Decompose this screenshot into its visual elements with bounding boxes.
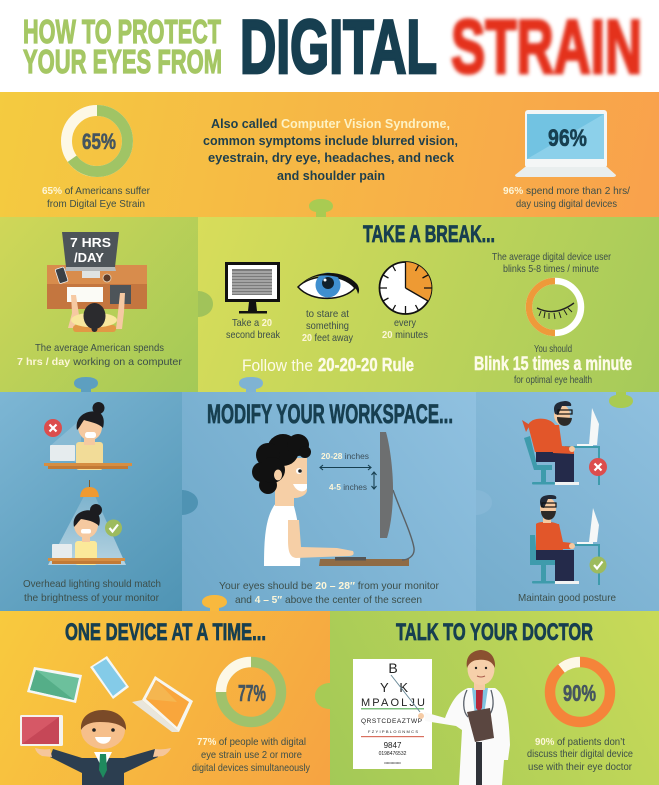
illustration: woman with no overhead light bbox=[44, 402, 132, 470]
donut chart: 90% bbox=[550, 662, 610, 722]
panel: overhead lighting bbox=[0, 377, 182, 611]
annotation: 20-28 inches: 20-28 inches bbox=[321, 451, 369, 461]
callout: follow the 20-20-20 rule: 20-20-20 Rule bbox=[318, 355, 414, 375]
annotation: 20-28 inches bbox=[320, 451, 371, 470]
text: average blink rate bbox=[492, 251, 611, 275]
icon: eye bbox=[298, 272, 359, 298]
panel: take a break bbox=[198, 217, 659, 392]
caption: overhead lighting: Overhead lighting should match bbox=[23, 578, 161, 590]
icon: green phone bbox=[27, 667, 82, 703]
caption: 77% of people: digital devices simultaneously bbox=[192, 762, 311, 774]
icon: laptop 96%: 96% bbox=[548, 125, 587, 152]
icon: clock bbox=[380, 262, 432, 314]
icon: orange laptop bbox=[132, 676, 193, 732]
illustration: woman with overhead lamp bbox=[48, 480, 126, 565]
caption: maintain good posture: Maintain good posture bbox=[518, 592, 616, 604]
eye chart: MPAOLJU bbox=[361, 697, 425, 709]
caption: eye distance: Your eyes should be 20 – 28″ from your monitor bbox=[219, 580, 439, 592]
caption: average American: 7 hrs / day working on a computer bbox=[17, 356, 183, 368]
callout: follow the 20-20-20 rule: Follow the bbox=[242, 357, 313, 375]
icon: puzzle tab bbox=[239, 377, 263, 392]
icon: puzzle tab bbox=[202, 595, 227, 611]
eye chart: 0000000000 bbox=[384, 761, 401, 765]
annotation: 4-5 inches: 4-5 inches bbox=[329, 482, 367, 492]
icon: puzzle tab bbox=[476, 490, 492, 515]
illustration: man with bad posture bbox=[522, 401, 600, 485]
text: computer vision syndrome description: and shoulder pain bbox=[277, 168, 385, 183]
icon: red cross bbox=[589, 458, 607, 476]
caption: to stare at something 20 feet away: to stare at bbox=[306, 308, 349, 320]
caption: 90% of patients: use with their eye doctor bbox=[528, 761, 632, 773]
caption: 65% of Americans: 65% of Americans suffer bbox=[42, 185, 150, 197]
heading: one device at a time: ONE DEVICE AT A TIME... bbox=[65, 619, 266, 646]
panel: intro statistics bbox=[0, 92, 659, 218]
callout: blink 15 times a minute bbox=[474, 343, 632, 386]
eye chart: B bbox=[388, 660, 398, 676]
donut chart: 65% bbox=[66, 110, 128, 172]
caption: every 20 minutes bbox=[382, 317, 428, 341]
text: average blink rate: blinks 5-8 times / minute bbox=[503, 263, 599, 275]
eye chart: 9847 bbox=[384, 741, 402, 750]
title word: digital: DIGITAL bbox=[240, 5, 437, 90]
text: computer vision syndrome description: Also called Computer Vision Syndrome, bbox=[211, 116, 450, 131]
caption: every 20 minutes: every bbox=[394, 317, 417, 329]
illustration: doctor bbox=[391, 650, 510, 785]
panel: one device at a time bbox=[0, 595, 330, 785]
caption: every 20 minutes: 20 minutes bbox=[382, 329, 428, 341]
title line: how to protect: HOW TO PROTECT bbox=[23, 13, 221, 50]
callout: blink 15 times a minute: You should bbox=[534, 343, 572, 355]
caption: eye distance: and 4 – 5″ above the center of the screen bbox=[235, 594, 422, 606]
panel: talk to your doctor bbox=[315, 611, 659, 785]
caption: 65% of Americans bbox=[42, 185, 150, 210]
icon: puzzle tab bbox=[182, 490, 198, 515]
heading: take a break: TAKE A BREAK... bbox=[363, 221, 495, 248]
caption: average American bbox=[17, 342, 183, 368]
caption: 65% of Americans: from Digital Eye Strain bbox=[47, 198, 145, 210]
icon: red tablet bbox=[20, 715, 63, 746]
caption: take a 20 second break: second break bbox=[226, 329, 281, 341]
illustration: juggling man bbox=[35, 710, 171, 785]
caption: average American: The average American spends bbox=[35, 342, 164, 354]
icon: puzzle tab bbox=[315, 683, 330, 709]
caption: 77% of people bbox=[192, 736, 311, 774]
caption: take a 20 second break bbox=[226, 317, 281, 341]
annotation: 4-5 inches bbox=[329, 472, 376, 492]
illustration: man with good posture bbox=[530, 495, 600, 585]
callout: follow the 20-20-20 rule bbox=[242, 355, 414, 375]
panel: 7 hours a day bbox=[0, 199, 333, 392]
icon: red cross bbox=[44, 419, 62, 437]
caption: 90% of patients: 90% of patients don’t bbox=[535, 736, 625, 748]
caption: 77% of people: 77% of people with digital bbox=[197, 736, 306, 748]
callout: blink 15 times a minute: for optimal eye health bbox=[514, 374, 592, 386]
caption: 96% spend: day using digital devices bbox=[516, 198, 617, 210]
caption: 77% of people: eye strain use 2 or more bbox=[201, 749, 302, 761]
illustration: person at desk: /DAY bbox=[74, 251, 105, 265]
illustration: man at monitor bbox=[252, 432, 414, 566]
caption: 90% of patients bbox=[527, 736, 633, 773]
icon: green check bbox=[105, 520, 122, 536]
caption: take a 20 second break: Take a 20 bbox=[232, 317, 272, 329]
icon: monitor bbox=[225, 262, 280, 314]
eye chart: FZYIPBLOGNMCS bbox=[368, 729, 418, 734]
icon: puzzle tab bbox=[74, 377, 98, 392]
text: computer vision syndrome description: common symptoms include blurred vision, bbox=[203, 133, 458, 148]
donut chart: 77%: 77% bbox=[238, 680, 266, 706]
donut chart: 90%: 90% bbox=[563, 680, 596, 706]
text: computer vision syndrome description bbox=[203, 116, 458, 183]
panel: modify your workspace bbox=[182, 377, 476, 611]
eye chart: 0198476532 bbox=[379, 751, 407, 757]
caption: overhead lighting: the brightness of your monitor bbox=[24, 592, 159, 604]
illustration: person at desk: 7 HRS bbox=[70, 236, 111, 250]
icon: puzzle tab bbox=[309, 199, 333, 217]
illustration: person at desk bbox=[47, 232, 147, 332]
caption: to stare at something 20 feet away: something bbox=[306, 320, 349, 332]
eye chart: Y K bbox=[380, 680, 408, 695]
caption: to stare at something 20 feet away bbox=[302, 308, 354, 344]
caption: 90% of patients: discuss their digital device bbox=[527, 748, 633, 760]
caption: 96% spend: 96% spend more than 2 hrs/ bbox=[503, 185, 630, 197]
title line: your eyes from: YOUR EYES FROM bbox=[23, 43, 222, 80]
caption: 96% spend bbox=[503, 185, 630, 210]
donut chart: 77% bbox=[221, 662, 281, 722]
text: computer vision syndrome description: eyestrain, dry eye, headaches, and neck bbox=[208, 150, 455, 165]
panel: posture bbox=[476, 392, 659, 611]
eye chart bbox=[353, 659, 432, 769]
donut chart: 65%: 65% bbox=[82, 129, 116, 154]
icon: puzzle tab bbox=[609, 392, 633, 408]
heading: modify your workspace: MODIFY YOUR WORKSPACE... bbox=[207, 399, 453, 429]
icon: puzzle tab bbox=[198, 291, 213, 317]
caption: eye distance bbox=[219, 580, 439, 606]
icon: blue phone bbox=[90, 656, 129, 699]
eye chart: QRSTCDEAZTWP bbox=[361, 718, 422, 725]
icon: blink ring with closed eye bbox=[529, 281, 581, 333]
text: average blink rate: The average digital device user bbox=[492, 251, 611, 263]
title bbox=[0, 0, 659, 92]
caption: overhead lighting bbox=[23, 578, 161, 604]
caption: to stare at something 20 feet away: 20 feet away bbox=[302, 332, 354, 344]
icon: laptop 96% bbox=[515, 110, 616, 177]
icon: green check bbox=[590, 556, 606, 574]
